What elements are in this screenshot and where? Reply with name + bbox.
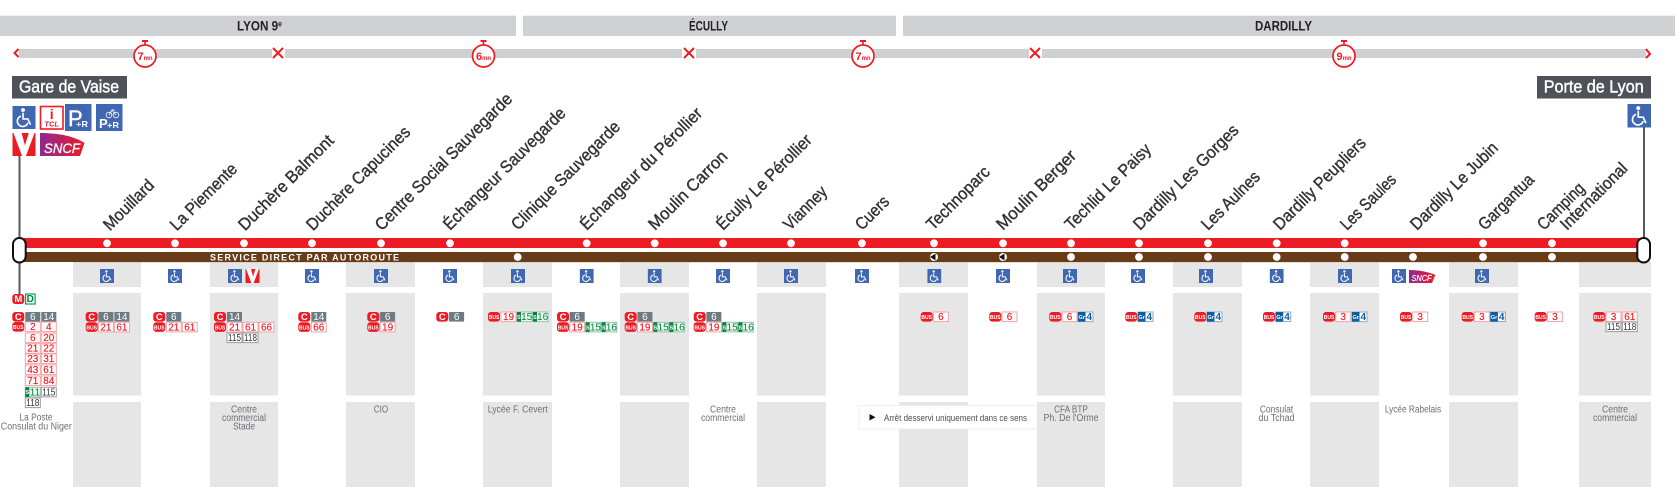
places of interest labels: Centre <box>710 405 736 416</box>
correspondences: Duchère Balmont <box>214 312 274 344</box>
station names: Les Saules <box>1336 170 1400 234</box>
correspondences: Échangeur du Pérollier: BUS <box>558 325 569 331</box>
correspondences: Techlid Le Paisy: 4 <box>1087 312 1093 323</box>
correspondences: Gare de Vaise: 61 <box>43 365 55 376</box>
places of interest labels: commercial <box>1593 413 1637 424</box>
correspondences: Gare de Vaise: 14 <box>43 312 55 323</box>
travel time bar <box>14 40 1650 67</box>
icon: bike P+R: P <box>99 116 108 131</box>
terminus label: Gare de Vaise: Gare de Vaise <box>19 77 119 97</box>
correspondences: Clinique Sauvegarde: BUS <box>489 315 500 321</box>
correspondences: Gargantua: Gr <box>1491 315 1498 321</box>
correspondences: Porte de Lyon: 118 <box>1623 322 1637 333</box>
correspondences: La Piemente: 21 <box>168 322 180 333</box>
correspondences: Écully Le Pérollier <box>694 312 754 333</box>
correspondences: Gare de Vaise: 11 <box>30 387 41 398</box>
correspondences: Écully Le Pérollier: BUS <box>694 325 706 331</box>
places of interest labels: Centre <box>231 405 257 416</box>
correspondences: Gare de Vaise: D <box>27 294 34 305</box>
places of interest labels: Consulat du Niger <box>1 422 72 433</box>
correspondences: Moulin Berger: 6 <box>1007 312 1013 323</box>
correspondences: Échangeur du Pérollier: 15 <box>590 322 601 333</box>
correspondences: La Piemente: BUS <box>154 325 165 331</box>
correspondences: La Piemente: 61 <box>184 322 196 333</box>
correspondences: Échangeur du Pérollier: C <box>560 312 567 323</box>
station names: International <box>1556 159 1631 234</box>
correspondences: Gare de Vaise: 23 <box>27 354 39 365</box>
correspondences: Échangeur Sauvegarde: 6 <box>454 312 460 323</box>
correspondences: La Piemente: C <box>156 312 163 323</box>
icon: bike P+R: +R <box>107 120 119 130</box>
terminus pill: right <box>1637 238 1650 262</box>
correspondences: Gargantua: 4 <box>1499 312 1505 323</box>
places of interest labels: commercial <box>701 413 745 424</box>
correspondences: Écully Le Pérollier: S <box>739 325 743 331</box>
correspondences: Duchère Capucines <box>298 312 326 333</box>
correspondences: Écully Le Pérollier: 16 <box>743 322 754 333</box>
correspondences: Échangeur Sauvegarde <box>436 312 464 323</box>
places of interest labels: commercial <box>222 413 266 424</box>
correspondences: Les Aulnes: Gr <box>1207 315 1215 321</box>
correspondences: Gare de Vaise: 6 <box>30 312 36 323</box>
accessibility and service icons row <box>100 269 1489 283</box>
station names: Mouillard <box>99 176 158 234</box>
station names: Duchère Balmont <box>234 131 338 234</box>
connector lines at the termini <box>18 127 1645 295</box>
stopwatch: 7 mn <box>852 40 874 67</box>
correspondences: Duchère Capucines: C <box>301 312 308 323</box>
icon: SNCF <box>40 133 84 156</box>
correspondences: Échangeur du Pérollier: S <box>586 325 590 331</box>
correspondences: Camping International: BUS <box>1535 315 1547 321</box>
station names: Technoparc <box>922 162 994 234</box>
correspondences: Gare de Vaise: S <box>25 390 29 396</box>
correspondences: Mouillard <box>86 312 129 333</box>
correspondences: Moulin Berger: BUS <box>990 315 1001 321</box>
correspondences: Porte de Lyon: 115 <box>1607 322 1620 333</box>
station names: Dardilly Les Gorges <box>1129 121 1243 234</box>
station names: Moulin Berger <box>992 146 1080 234</box>
correspondences: Duchère Balmont: 118 <box>244 333 257 344</box>
correspondences: Clinique Sauvegarde: 15 <box>521 312 533 323</box>
places of interest labels: CIO <box>374 405 388 416</box>
correspondences: Clinique Sauvegarde: S <box>533 315 537 321</box>
correspondences: Gare de Vaise: 84 <box>43 376 55 387</box>
zone bar: Écully <box>523 16 896 36</box>
correspondences: Camping International <box>1535 312 1562 323</box>
correspondences: Technoparc: BUS <box>921 315 933 321</box>
correspondences: Écully Le Pérollier: S <box>723 325 727 331</box>
correspondences: Gare de Vaise: 2 <box>30 322 36 333</box>
service direct label: SERVICE DIRECT PAR AUTOROUTE <box>210 252 399 262</box>
correspondences: Échangeur du Pérollier: S <box>602 325 606 331</box>
correspondences: Gargantua: BUS <box>1462 315 1474 321</box>
stopwatch: 9 mn: 9mn <box>1336 51 1352 63</box>
correspondences: Gare de Vaise: BUS <box>13 325 24 331</box>
correspondences: Écully Le Pérollier: C <box>696 312 703 323</box>
correspondences: Moulin Carron: 6 <box>642 312 648 323</box>
legend: one-way stop <box>859 406 1037 429</box>
one-way stop marker: Moulin Berger <box>999 253 1007 261</box>
correspondences: Dardilly Le Jubin <box>1400 312 1428 323</box>
zone bar: Lyon 9e: LYON 9 <box>237 19 285 34</box>
station names: Camping <box>1533 179 1589 234</box>
correspondences: Écully Le Pérollier: 15 <box>727 322 738 333</box>
correspondences: Gare de Vaise: 4 <box>46 322 52 333</box>
correspondences: Gare de Vaise: M <box>14 294 22 305</box>
station names: Échangeur du Pérollier <box>576 104 706 234</box>
icon: Vélo'v <box>12 133 36 156</box>
correspondences: Moulin Carron: C <box>627 312 634 323</box>
station names: Écully Le Pérollier <box>712 130 816 234</box>
icon: SNCF, Dardilly Le Jubin <box>1409 270 1435 283</box>
places of interest labels: Stade <box>233 422 255 432</box>
icon: P+R <box>65 104 92 131</box>
station names: Dardilly Le Jubin <box>1406 138 1502 234</box>
correspondences: Gargantua: 3 <box>1479 312 1485 323</box>
correspondences: Les Saules: 3 <box>1340 312 1346 323</box>
correspondences: Gare de Vaise: 71 <box>27 376 39 387</box>
correspondences: Gare de Vaise: 20 <box>43 333 55 344</box>
correspondences: Duchère Balmont: C <box>217 312 224 323</box>
correspondences: Échangeur Sauvegarde: C <box>439 312 446 323</box>
icon: bike P+R <box>96 104 122 131</box>
zone bar: Lyon 9e: e <box>278 20 282 29</box>
correspondences: Moulin Carron <box>625 312 685 333</box>
icon: P+R: P <box>68 106 83 131</box>
places of interest labels: La Poste <box>20 413 53 424</box>
correspondences: Technoparc <box>921 312 948 323</box>
correspondences: Duchère Balmont: BUS <box>215 325 226 331</box>
icon: TCL information: i <box>50 106 54 122</box>
correspondences: Centre Social Sauvegarde: 19 <box>382 322 394 333</box>
correspondences: Clinique Sauvegarde: 19 <box>503 312 514 323</box>
correspondences: Centre Social Sauvegarde: 6 <box>385 312 391 323</box>
places of interest labels: CFA BTP <box>1054 405 1088 416</box>
correspondences: Moulin Carron: 15 <box>658 322 669 333</box>
correspondences: Les Aulnes: 4 <box>1216 312 1222 323</box>
correspondences: Gare de Vaise <box>12 294 56 409</box>
correspondences: La Piemente: 6 <box>171 312 177 323</box>
correspondences: Mouillard: 21 <box>100 322 112 333</box>
correspondences: Les Saules: 4 <box>1361 312 1367 323</box>
correspondences: Dardilly Les Gorges: BUS <box>1126 315 1137 321</box>
correspondences: Duchère Balmont: 61 <box>245 322 256 333</box>
correspondences: Moulin Carron: S <box>654 325 658 331</box>
station names: Gargantua <box>1474 170 1538 234</box>
icon: TCL information: TCL <box>44 120 59 128</box>
legend: one-way stop: Arrêt desservi uniquement dans ce sens <box>884 413 1027 424</box>
correspondences: Gare de Vaise: 115 <box>42 387 56 398</box>
places of interest labels: Lycée F. Cevert <box>488 405 548 416</box>
correspondences: Moulin Carron: BUS <box>625 325 637 331</box>
correspondences: Mouillard: 14 <box>116 312 128 323</box>
station names: Les Aulnes <box>1197 167 1264 234</box>
correspondences: Mouillard: 61 <box>116 322 128 333</box>
correspondences: Techlid Le Paisy <box>1049 312 1093 323</box>
zone bar: Dardilly <box>903 16 1675 36</box>
stopwatch: 6 mn <box>472 40 494 67</box>
correspondences: Gare de Vaise: 6 <box>30 333 36 344</box>
correspondences: Duchère Capucines: 14 <box>313 312 325 323</box>
zone bar: Dardilly: DARDILLY <box>1255 19 1312 34</box>
correspondences: Clinique Sauvegarde: S <box>517 315 521 321</box>
zone bar: Lyon 9e <box>0 16 516 36</box>
correspondences: Duchère Balmont: 115 <box>228 333 241 344</box>
terminus pill: left <box>13 238 26 262</box>
station names: Moulin Carron <box>644 147 731 234</box>
correspondences: Centre Social Sauvegarde: C <box>370 312 377 323</box>
correspondences: Centre Social Sauvegarde <box>367 312 395 333</box>
correspondences: Duchère Balmont: 14 <box>229 312 240 323</box>
correspondences: Porte de Lyon <box>1593 312 1637 333</box>
correspondences: Les Saules: Gr <box>1352 315 1360 321</box>
correspondences: Duchère Capucines: 66 <box>313 322 325 333</box>
correspondences: Techlid Le Paisy: BUS <box>1050 315 1061 321</box>
icon: accessible, Porte de Lyon <box>1628 104 1651 128</box>
correspondences: Moulin Carron: S <box>670 325 674 331</box>
correspondences: Les Aulnes <box>1194 312 1222 323</box>
station names: Centre Social Sauvegarde <box>371 89 516 234</box>
correspondences: Échangeur du Pérollier: 6 <box>574 312 580 323</box>
stopwatch: 7 mn: 7mn <box>855 51 871 63</box>
correspondences: Gare de Vaise: C <box>15 312 22 323</box>
correspondences: La Piemente <box>153 312 197 333</box>
correspondences: Duchère Balmont: 66 <box>261 322 272 333</box>
places of interest labels: Ph. De l'Orme <box>1044 413 1099 424</box>
correspondences: Les Aulnes: BUS <box>1195 315 1206 321</box>
correspondences: Mouillard: C <box>88 312 95 323</box>
station names: Duchère Capucines <box>302 123 414 234</box>
correspondences: Dardilly Peupliers: 4 <box>1284 312 1290 323</box>
line band: brown direction <box>20 252 1651 263</box>
correspondences: Porte de Lyon: 3 <box>1611 312 1617 323</box>
correspondences: Gare de Vaise: 31 <box>43 354 55 365</box>
correspondences: Moulin Berger <box>989 312 1017 323</box>
correspondences: Échangeur du Pérollier: 19 <box>572 322 583 333</box>
correspondences: Dardilly Les Gorges <box>1125 312 1153 323</box>
stopwatch: 7 mn: 7mn <box>137 51 153 63</box>
station names <box>99 89 1631 234</box>
zone bar: Écully: ÉCULLY <box>689 19 728 34</box>
correspondences: Dardilly Le Jubin: BUS <box>1401 315 1412 321</box>
correspondences: Gare de Vaise: 21 <box>27 344 39 355</box>
correspondences: Mouillard: 6 <box>103 312 109 323</box>
correspondences: Dardilly Peupliers: BUS <box>1264 315 1275 321</box>
station names: La Piemente <box>166 159 241 234</box>
correspondences: Écully Le Pérollier: 6 <box>711 312 717 323</box>
station names: Vianney <box>779 182 831 234</box>
station names: Clinique Sauvegarde <box>507 117 624 234</box>
places of interest labels: Consulat <box>1260 405 1293 416</box>
correspondences: Duchère Capucines: BUS <box>299 325 310 331</box>
correspondences: Dardilly Les Gorges: Gr <box>1138 315 1146 321</box>
correspondences: Centre Social Sauvegarde: BUS <box>368 325 379 331</box>
correspondences: Dardilly Peupliers <box>1263 312 1291 323</box>
icon: Vélo'v, Duchère Balmont <box>246 269 260 283</box>
icon: SNCF: SNCF <box>44 141 81 156</box>
correspondences: Dardilly Le Jubin: 3 <box>1417 312 1423 323</box>
terminus label: Porte de Lyon: Porte de Lyon <box>1544 76 1644 96</box>
correspondences: Mouillard: BUS <box>86 325 98 331</box>
correspondences: Porte de Lyon: 61 <box>1624 312 1636 323</box>
places of interest labels: Lycée Rabelais <box>1385 405 1441 416</box>
correspondences: Échangeur du Pérollier: 16 <box>606 322 617 333</box>
correspondences: Gare de Vaise: 22 <box>43 344 55 355</box>
correspondences: Clinique Sauvegarde <box>488 312 549 323</box>
correspondences: Techlid Le Paisy: Gr <box>1078 315 1086 321</box>
correspondences: Technoparc: 6 <box>938 312 944 323</box>
correspondences: Clinique Sauvegarde: 16 <box>537 312 549 323</box>
correspondences: Camping International: 3 <box>1552 312 1558 323</box>
correspondences: Moulin Carron: 19 <box>639 322 651 333</box>
correspondences: Les Saules: BUS <box>1324 315 1335 321</box>
stopwatch: 7 mn <box>134 40 156 67</box>
correspondences: Les Saules <box>1323 312 1367 323</box>
stopwatch: 6 mn: 6mn <box>476 51 491 63</box>
line band: red direction <box>20 238 1640 248</box>
icon: P+R: +R <box>76 119 88 129</box>
one-way stop marker: Technoparc <box>930 253 938 261</box>
correspondences: Moulin Carron: 16 <box>674 322 685 333</box>
correspondences: Duchère Balmont: 21 <box>229 322 240 333</box>
places of interest labels: Centre <box>1602 405 1628 416</box>
places of interest labels: du Tchad <box>1258 413 1294 424</box>
station names: Cuers <box>851 192 893 234</box>
stopwatch: 9 mn <box>1333 40 1355 67</box>
correspondences: Porte de Lyon: BUS <box>1594 315 1605 321</box>
station names: Échangeur Sauvegarde <box>439 104 570 234</box>
correspondences: Gare de Vaise: 118 <box>26 398 40 409</box>
station names: Dardilly Peupliers <box>1269 133 1370 234</box>
correspondences: Échangeur du Pérollier <box>557 312 617 333</box>
places of interest labels <box>1 405 1637 433</box>
station names: Techlid Le Paisy <box>1061 139 1155 234</box>
correspondences: Dardilly Les Gorges: 4 <box>1147 312 1153 323</box>
icon: TCL information <box>40 106 63 129</box>
correspondences: Gare de Vaise: 43 <box>27 365 39 376</box>
correspondences: Gargantua <box>1462 312 1505 323</box>
icon: accessible, Gare de Vaise <box>12 106 36 129</box>
correspondences: Écully Le Pérollier: 19 <box>708 322 720 333</box>
correspondences: Dardilly Peupliers: Gr <box>1276 315 1283 321</box>
grey column backgrounds <box>73 262 1651 487</box>
icon: SNCF, Dardilly Le Jubin: SNCF <box>1412 273 1432 283</box>
correspondences: Techlid Le Paisy: 6 <box>1067 312 1073 323</box>
